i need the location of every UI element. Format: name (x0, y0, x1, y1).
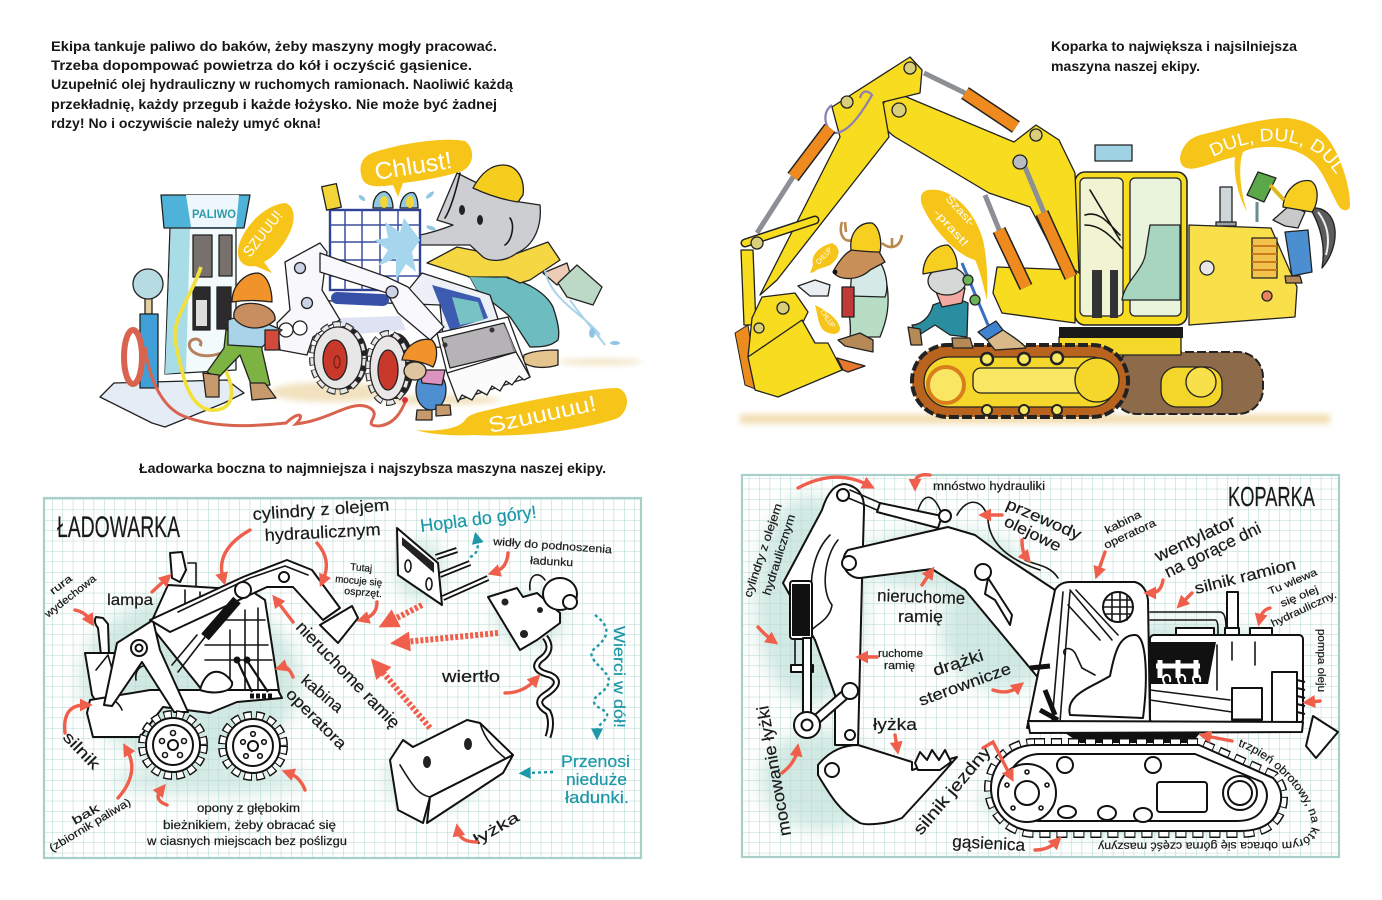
labels: excavator parts: ruchome (878, 648, 923, 660)
labels: excavator parts: przewody (1003, 496, 1083, 544)
seat and levers (200, 656, 274, 696)
labels: excavator parts: na gorące dni (1161, 518, 1264, 582)
callouts: teal notes: nieduże (566, 770, 627, 789)
labels: loader parts: Tutaj (350, 562, 373, 575)
speech bubble: Szuuuuu (416, 388, 627, 438)
labels: excavator parts: wentylator (1151, 511, 1239, 566)
heading: Ładowarka: ŁADOWARKA (57, 511, 180, 544)
swing bearing and pillar (1059, 327, 1183, 355)
boom (842, 510, 1055, 680)
deck (1028, 721, 1303, 733)
small helper worker (402, 339, 451, 420)
labels: loader parts: wydechowa (42, 573, 99, 621)
labels: excavator parts: hydraulicznym (761, 513, 798, 597)
labels: excavator parts: mocowanie łyżki (753, 704, 795, 838)
speech bubble: Chlup upper: CHLUP (814, 245, 834, 266)
speech bubble: Szast-prast: -prast! (931, 207, 970, 249)
body (87, 690, 282, 737)
labels: excavator parts: cylindry z olejem (742, 502, 785, 599)
text block: excavator intro (1051, 39, 1297, 74)
stick (783, 484, 880, 745)
cab (1075, 172, 1187, 325)
labels: loader parts: cylindry z olejem (252, 495, 390, 524)
attachment: forks (397, 528, 488, 605)
speech bubble: Chlup upper (810, 243, 839, 273)
elephant worker (420, 165, 620, 367)
labels: excavator parts: drążki (931, 648, 986, 680)
exhaust stack (1216, 187, 1236, 226)
ground strip (740, 414, 1330, 424)
front wheel (313, 325, 368, 391)
labels: excavator parts: silnik ramion (1193, 556, 1298, 598)
blue cylinder (337, 298, 383, 300)
labels: excavator parts: olejowe (1001, 513, 1064, 555)
illustration: crew servicing the yellow excavator (734, 56, 1350, 428)
speech bubble: Dul Dul Dul (1180, 118, 1350, 212)
text block: fuel and maintenance intro: Ekipa tankuje paliwo do baków, żeby maszyny mogły pracować. (51, 39, 497, 54)
bucket (818, 745, 957, 824)
swing bearing (1065, 733, 1200, 743)
labels: excavator parts: operatora (1102, 517, 1159, 552)
labels: excavator parts: łyżka (873, 715, 918, 734)
speech bubble: Szast-prast (921, 190, 987, 300)
labels: excavator parts: się olej (1279, 584, 1320, 610)
rear hydraulics (400, 273, 500, 340)
display on cab roof (1095, 145, 1132, 161)
moose worker (798, 222, 902, 352)
cage (322, 184, 420, 290)
flag-shaped pump cover (1306, 716, 1338, 758)
illustration: crew servicing the skid loader at a fuel pump (100, 140, 642, 438)
text block: fuel and maintenance intro: rdzy! No i oczywiście należy umyć okna! (51, 116, 321, 131)
exhaust pipe (95, 617, 109, 655)
graph paper (742, 475, 1339, 857)
labels: excavator parts (742, 480, 1339, 855)
callouts: teal notes: Wierci w dół! (610, 626, 627, 728)
callouts: teal notes: ładunki. (565, 788, 629, 807)
rear track (1112, 352, 1263, 414)
arrows: excavator labels (758, 475, 1320, 850)
heading: Koparka: KOPARKA (1228, 481, 1315, 512)
labels: excavator parts: hydrauliczny. (1269, 589, 1339, 630)
boom cylinders (985, 155, 1071, 287)
yellow fuel hose (175, 267, 231, 410)
labels: loader parts: wiertło (441, 667, 500, 686)
labels: loader parts: łyżka (470, 808, 523, 848)
dog worker (908, 245, 1026, 350)
operator cage (150, 585, 280, 700)
speech bubble: Chlust (360, 140, 472, 197)
labels: loader parts: opony z głębokim (197, 803, 300, 815)
labels: loader parts: osprzęt. (344, 586, 383, 600)
rear wheel (369, 333, 414, 402)
labels: loader parts: widły do podnoszenia (492, 536, 613, 556)
lamp (170, 552, 196, 590)
labels: loader parts: bak (70, 800, 103, 828)
labels: excavator parts: nieruchome (877, 586, 965, 608)
labels: excavator parts: pompa oleju (1315, 629, 1327, 692)
red air hose (145, 347, 406, 426)
side plate (104, 620, 188, 712)
labels: loader parts: hydraulicznym (264, 520, 381, 545)
tool plate (320, 606, 358, 643)
labels: excavator parts: Tu wlewa (1266, 566, 1319, 598)
front track (912, 345, 1128, 417)
attachment: drill (488, 575, 577, 737)
engine detail (96, 655, 155, 710)
panel: excavator diagram (740, 473, 1340, 858)
lift arm (150, 560, 340, 632)
callouts: teal notes: Przenosi (561, 752, 630, 771)
rear wheel (223, 716, 283, 776)
arrows: loader labels (65, 530, 609, 842)
labels: excavator parts: silnik jezdny (910, 742, 995, 839)
hoses on stick (825, 92, 872, 133)
boom (881, 93, 1079, 273)
labels: loader parts: nieruchome ramię (292, 618, 404, 732)
monkey worker (189, 273, 282, 400)
bucket (437, 317, 530, 402)
stick cylinder (877, 503, 942, 528)
labels: loader parts (42, 495, 613, 855)
air gauge and coiled hose (124, 269, 163, 388)
bucket linkage and bucket (735, 220, 865, 397)
labels: loader parts: kabina (297, 672, 346, 717)
text block: excavator intro: maszyna naszej ekipy. (1051, 59, 1200, 74)
engine box (85, 653, 122, 708)
speech bubble: Dul Dul Dul: DUL, DUL, DUL (1209, 128, 1340, 174)
labels: loader parts: (zbiornik paliwa) (47, 796, 133, 855)
labels: excavator parts: ramię (884, 660, 915, 672)
front wheel (143, 715, 203, 775)
engine housing (1150, 592, 1305, 723)
bucket cylinder (790, 581, 813, 725)
labels: loader parts: ładunku (530, 555, 573, 569)
speech bubble: Chlup lower: CHLUP (818, 308, 837, 330)
excavator line drawing (783, 484, 1338, 834)
fuel pump: PALIWO (192, 207, 236, 221)
callouts: teal notes: Hopla do góry! (419, 502, 538, 536)
boom base (993, 267, 1075, 323)
speech bubble: Szast-prast: Szast- (943, 193, 977, 230)
heading: loader caption: Ładowarka boczna to najmniejsza i najszybsza maszyna naszej ekipy. (139, 461, 606, 476)
labels: loader parts: rura (48, 573, 75, 597)
skid loader (277, 184, 530, 402)
labels: excavator parts: mnóstwo hydrauliki (933, 481, 1045, 493)
labels: excavator parts: kabina (1103, 508, 1144, 537)
labels: excavator parts: sterownicze (917, 661, 1014, 710)
panel: loader diagram (42, 495, 641, 858)
stick cylinder (924, 73, 1016, 127)
stick (760, 57, 922, 295)
labels: excavator parts: gąsienica (952, 832, 1026, 855)
linkage (794, 683, 858, 740)
engine housing (1189, 225, 1297, 325)
speech bubble: Chlust: Chlust! (373, 147, 454, 186)
speech bubble: Szuuu: SZUUU! (240, 207, 286, 260)
skunk worker (1247, 172, 1335, 283)
labels: loader parts: lampa (107, 592, 153, 609)
labels: excavator parts: trzpień obrotowy, na którym obraca się górna część maszyny (1098, 739, 1320, 852)
operator seat, cab frame and levers (1027, 582, 1150, 728)
body (306, 300, 444, 352)
callouts: teal notes (419, 502, 630, 807)
labels: loader parts: bieżnikiem, żeby obracać się (163, 820, 336, 832)
hoses over boom (918, 497, 1058, 578)
text block: fuel and maintenance intro (51, 39, 513, 131)
attachment: bucket (390, 720, 513, 823)
text block: fuel and maintenance intro: Trzeba dopompować powietrza do kół i oczyścić gąsienice. (51, 58, 472, 73)
loader line drawing (85, 552, 358, 776)
speech bubble: Szuuu (238, 203, 294, 273)
boom cylinder (205, 600, 237, 637)
text block: excavator intro: Koparka to największa i najsilniejsza (1051, 39, 1297, 54)
labels: excavator parts: ramię (898, 607, 943, 626)
speech bubble: Szuuuuu: Szuuuuu! (486, 391, 599, 438)
labels: loader parts: w ciasnych miejscach bez poślizgu (146, 836, 347, 848)
labels: loader parts: mocuje się (335, 574, 383, 589)
text block: fuel and maintenance intro: przekładnię, każdy przegub i każde łożysko. Nie może być żadnej (51, 97, 497, 112)
ground shadow (270, 359, 642, 405)
labels: loader parts: silnik (59, 729, 103, 774)
water splash (358, 190, 436, 280)
bucket cylinder (757, 128, 830, 233)
text block: fuel and maintenance intro: Uzupełnić olej hydrauliczny w ruchomych ramionach. Naoliwić każdą (51, 77, 513, 92)
graph paper (44, 498, 641, 858)
labels: loader parts: operatora (282, 686, 349, 753)
track (988, 742, 1284, 834)
fuel pump (100, 195, 250, 427)
side plate and arm (277, 243, 340, 355)
